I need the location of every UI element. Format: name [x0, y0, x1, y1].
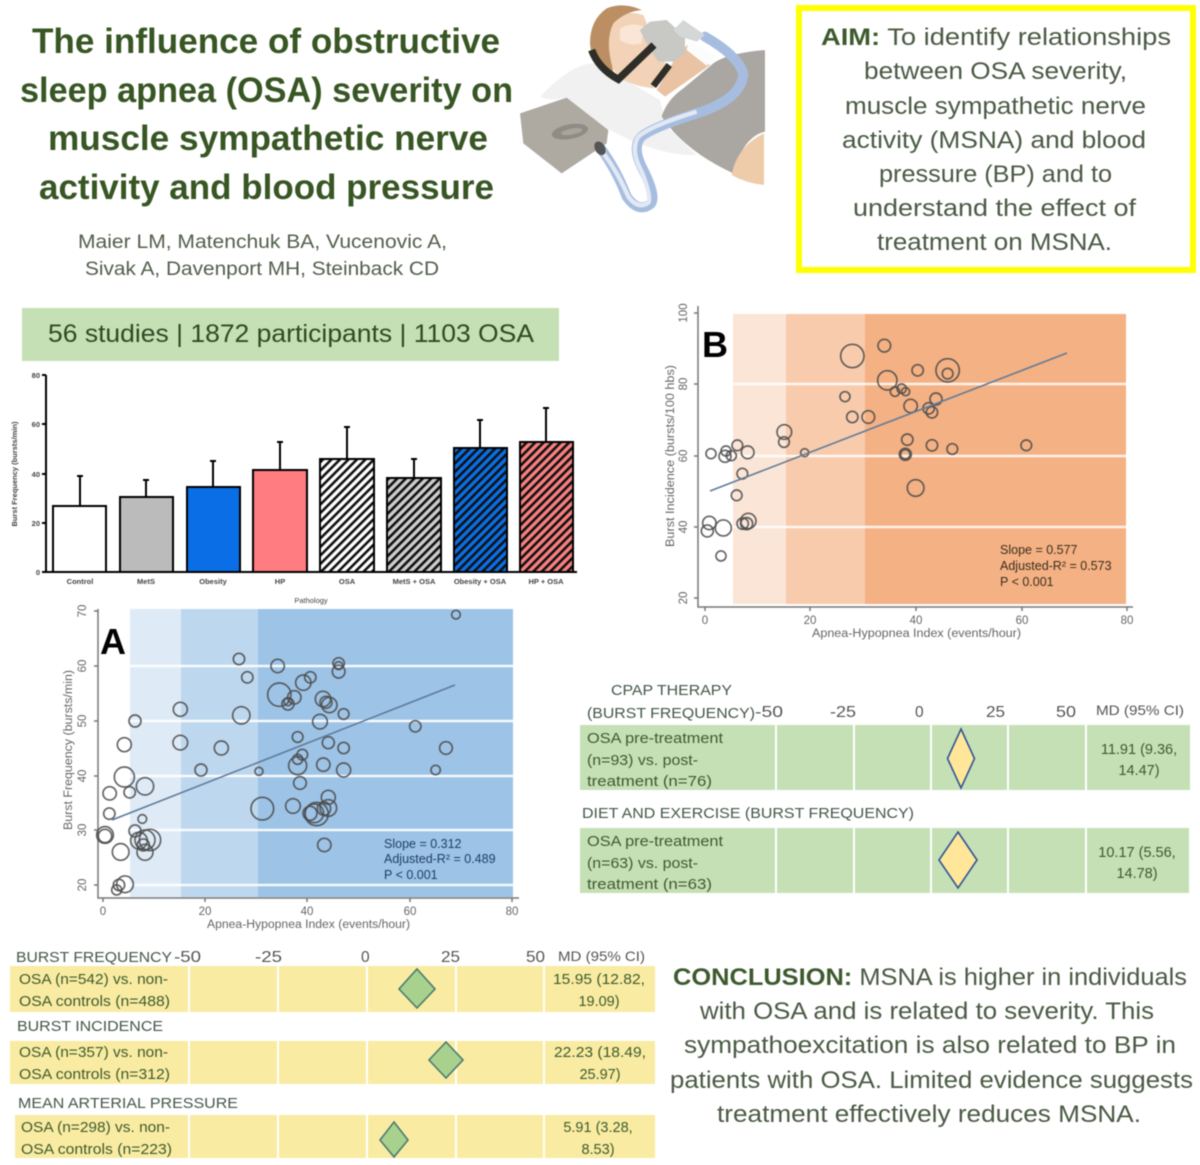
title: [20, 22, 513, 207]
forest plot: OSA vs controls: -50: [174, 949, 201, 966]
row: burst frequency: OSA (n=542) vs. non-: [19, 972, 168, 988]
scatter chart A: burst frequency vs AHI: Adjusted-R² = 0.489: [384, 852, 496, 866]
scatter chart A: burst frequency vs AHI: 70: [77, 605, 89, 617]
bar chart: burst frequency by pathology: 0: [36, 568, 40, 577]
title: sleep apnea (OSA) severity on: [20, 71, 513, 110]
scatter chart A: burst frequency vs AHI: 30: [77, 824, 89, 836]
conclusion text: [670, 964, 1193, 1128]
panel: aim: activity (MSNA) and blood: [842, 127, 1146, 154]
row: mean arterial pressure: OSA (n=298) vs. non-: [21, 1120, 170, 1136]
forest plot: treatment effects: 25: [986, 704, 1005, 721]
bar chart: burst frequency by pathology: Pathology: [294, 596, 328, 605]
bar chart: burst frequency by pathology: OSA: [339, 577, 356, 586]
banner: study counts: 56 studies | 1872 participants | 1103 OSA: [48, 320, 534, 348]
forest plot: OSA vs controls: MD (95% CI): [558, 948, 645, 964]
bar chart: burst frequency by pathology: Burst Frequency (bursts/min): [10, 421, 19, 527]
bar chart: burst frequency by pathology: Control: [67, 577, 93, 586]
forest plot: treatment effects: 50: [1056, 704, 1076, 721]
authors: Maier LM, Matenchuk BA, Vucenovic A,: [78, 232, 447, 253]
bar chart: burst frequency by pathology: MetS: [137, 577, 155, 586]
scatter chart A: burst frequency vs AHI: [63, 605, 519, 931]
conclusion text: sympathoexcitation is also related to BP in: [684, 1032, 1176, 1059]
row: CPAP therapy: 14.47): [1118, 763, 1160, 779]
forest plot: treatment effects: -25: [830, 704, 856, 721]
panel: aim: understand the effect of: [853, 195, 1136, 222]
scatter chart B: burst incidence vs AHI: Slope = 0.577: [1000, 543, 1078, 557]
row: burst frequency: 19.09): [578, 994, 620, 1010]
row: mean arterial pressure: 5.91 (3.28,: [563, 1120, 633, 1136]
row: diet and exercise: 14.78): [1116, 866, 1158, 882]
forest plot: OSA vs controls: BURST FREQUENCY: [16, 949, 172, 966]
scatter chart A: burst frequency vs AHI: 80: [506, 906, 518, 918]
panel: aim: pressure (BP) and to: [879, 161, 1112, 188]
row: CPAP therapy: [580, 725, 1190, 790]
bar chart: burst frequency by pathology: 60: [32, 420, 40, 429]
title: The influence of obstructive: [32, 22, 500, 61]
row: mean arterial pressure: OSA controls (n=223): [21, 1142, 172, 1158]
scatter chart B: burst incidence vs AHI: 40: [910, 615, 922, 627]
row: burst incidence: OSA controls (n=312): [19, 1067, 170, 1083]
row: burst incidence: OSA (n=357) vs. non-: [19, 1045, 168, 1061]
row: diet and exercise: 10.17 (5.56,: [1098, 845, 1176, 861]
title: muscle sympathetic nerve: [48, 119, 488, 158]
row: burst frequency: OSA controls (n=488): [19, 994, 170, 1010]
scatter chart A: burst frequency vs AHI: 60: [404, 906, 416, 918]
panel: aim: [799, 8, 1193, 270]
title: activity and blood pressure: [39, 168, 494, 207]
bar chart: burst frequency by pathology: HP: [275, 577, 285, 586]
authors: [78, 232, 447, 280]
panel: aim: treatment on MSNA.: [877, 229, 1112, 256]
scatter chart B: burst incidence vs AHI: 60: [678, 450, 690, 462]
conclusion text: treatment effectively reduces MSNA.: [717, 1101, 1141, 1128]
scatter chart B: burst incidence vs AHI: 80: [1121, 615, 1133, 627]
scatter chart A: burst frequency vs AHI: P < 0.001: [384, 868, 438, 882]
row: diet and exercise: [580, 828, 1189, 893]
conclusion text: patients with OSA. Limited evidence suggests: [670, 1067, 1193, 1094]
scatter chart B: burst incidence vs AHI: [665, 303, 1133, 640]
forest plot: treatment effects: 0: [915, 704, 924, 721]
row: burst frequency: [10, 966, 655, 1012]
scatter chart A: burst frequency vs AHI: Burst Frequency (bursts/min): [63, 670, 75, 830]
row: diet and exercise: (n=63) vs. post-: [587, 856, 698, 872]
scatter chart A: burst frequency vs AHI: 20: [77, 879, 89, 891]
forest plot: OSA vs controls: 50: [526, 949, 545, 966]
row: CPAP therapy: (n=93) vs. post-: [587, 753, 698, 769]
row: burst incidence: 22.23 (18.49,: [554, 1045, 646, 1061]
row: CPAP therapy: 11.91 (9.36,: [1101, 742, 1177, 758]
banner: study counts: [22, 308, 559, 361]
scatter chart B: burst incidence vs AHI: 20: [804, 615, 816, 627]
data points B: [701, 339, 1032, 561]
scatter chart B: burst incidence vs AHI: 20: [678, 592, 690, 604]
forest plot: treatment effects: MD (95% CI): [1096, 702, 1184, 718]
panel: aim: muscle sympathetic nerve: [845, 93, 1146, 120]
scatter chart B: burst incidence vs AHI: Burst Incidence (bursts/100 hbs): [665, 365, 677, 547]
scatter chart B: burst incidence vs AHI: Apnea-Hypopnea Index (events/hour): [812, 628, 1021, 640]
bar chart: burst frequency by pathology: 80: [32, 371, 40, 380]
scatter chart A: burst frequency vs AHI: Apnea-Hypopnea Index (events/hour): [207, 919, 410, 931]
conclusion text: CONCLUSION: MSNA is higher in individuals: [673, 964, 1187, 991]
scatter chart B: burst incidence vs AHI: 40: [678, 521, 690, 533]
bar chart: burst frequency by pathology: 20: [32, 519, 40, 528]
forest plot: OSA vs controls: -25: [255, 949, 282, 966]
row: mean arterial pressure: [15, 1115, 655, 1158]
scatter chart B: burst incidence vs AHI: Adjusted-R² = 0.573: [1000, 559, 1112, 573]
row: CPAP therapy: treatment (n=76): [587, 774, 712, 790]
conclusion text: with OSA and is related to severity. This: [699, 998, 1154, 1025]
row: diet and exercise: treatment (n=63): [587, 877, 712, 893]
row: burst incidence: 25.97): [579, 1067, 621, 1083]
scatter chart A: burst frequency vs AHI: A: [100, 621, 126, 662]
icon: CPAP patient illustration: [520, 5, 765, 207]
forest plot: OSA vs controls: [10, 948, 655, 1158]
row: burst incidence: [10, 1041, 655, 1084]
bar chart: burst frequency by pathology: 40: [32, 470, 40, 479]
bar chart: burst frequency by pathology: MetS + OSA: [393, 577, 436, 586]
scatter chart B: burst incidence vs AHI: 60: [1016, 615, 1028, 627]
row: diet and exercise: OSA pre-treatment: [587, 834, 723, 850]
scatter chart B: burst incidence vs AHI: 100: [678, 303, 690, 323]
scatter chart A: burst frequency vs AHI: 0: [100, 906, 106, 918]
scatter chart B: burst incidence vs AHI: 0: [702, 615, 708, 627]
panel: aim: AIM: To identify relationships: [821, 24, 1171, 51]
data points A: [97, 610, 460, 895]
bar chart: burst frequency by pathology: Obesity: [199, 577, 228, 586]
forest plot: OSA vs controls: MEAN ARTERIAL PRESSURE: [18, 1095, 238, 1112]
scatter chart A: burst frequency vs AHI: 40: [77, 770, 89, 782]
scatter chart B: burst incidence vs AHI: 80: [678, 378, 690, 390]
scatter chart A: burst frequency vs AHI: 60: [77, 660, 89, 672]
forest plot: treatment effects: -50: [755, 704, 783, 721]
forest plot: treatment effects: (BURST FREQUENCY): [587, 705, 755, 722]
bar chart: burst frequency by pathology: HP + OSA: [528, 577, 564, 586]
bar chart: burst frequency by pathology: Obesity + OSA: [454, 577, 507, 586]
row: burst frequency: 15.95 (12.82,: [553, 972, 645, 988]
authors: Sivak A, Davenport MH, Steinback CD: [85, 259, 439, 280]
forest plot: OSA vs controls: 0: [361, 949, 370, 966]
panel: aim: between OSA severity,: [864, 58, 1127, 85]
scatter chart A: burst frequency vs AHI: 20: [199, 906, 211, 918]
bar chart: burst frequency by pathology: [10, 371, 577, 605]
forest plot: OSA vs controls: BURST INCIDENCE: [17, 1018, 163, 1035]
scatter chart B: burst incidence vs AHI: P < 0.001: [1000, 575, 1054, 589]
forest plot: treatment effects: [580, 682, 1190, 893]
forest plot: OSA vs controls: 25: [441, 949, 460, 966]
forest plot: treatment effects: DIET AND EXERCISE (BURST FREQUENCY): [582, 805, 914, 822]
forest plot: treatment effects: CPAP THERAPY: [611, 682, 732, 699]
scatter chart A: burst frequency vs AHI: 40: [301, 906, 313, 918]
row: mean arterial pressure: 8.53): [581, 1142, 615, 1158]
row: CPAP therapy: OSA pre-treatment: [587, 731, 723, 747]
scatter chart A: burst frequency vs AHI: 50: [77, 715, 89, 727]
scatter chart B: burst incidence vs AHI: B: [702, 324, 728, 365]
scatter chart A: burst frequency vs AHI: Slope = 0.312: [384, 837, 462, 851]
